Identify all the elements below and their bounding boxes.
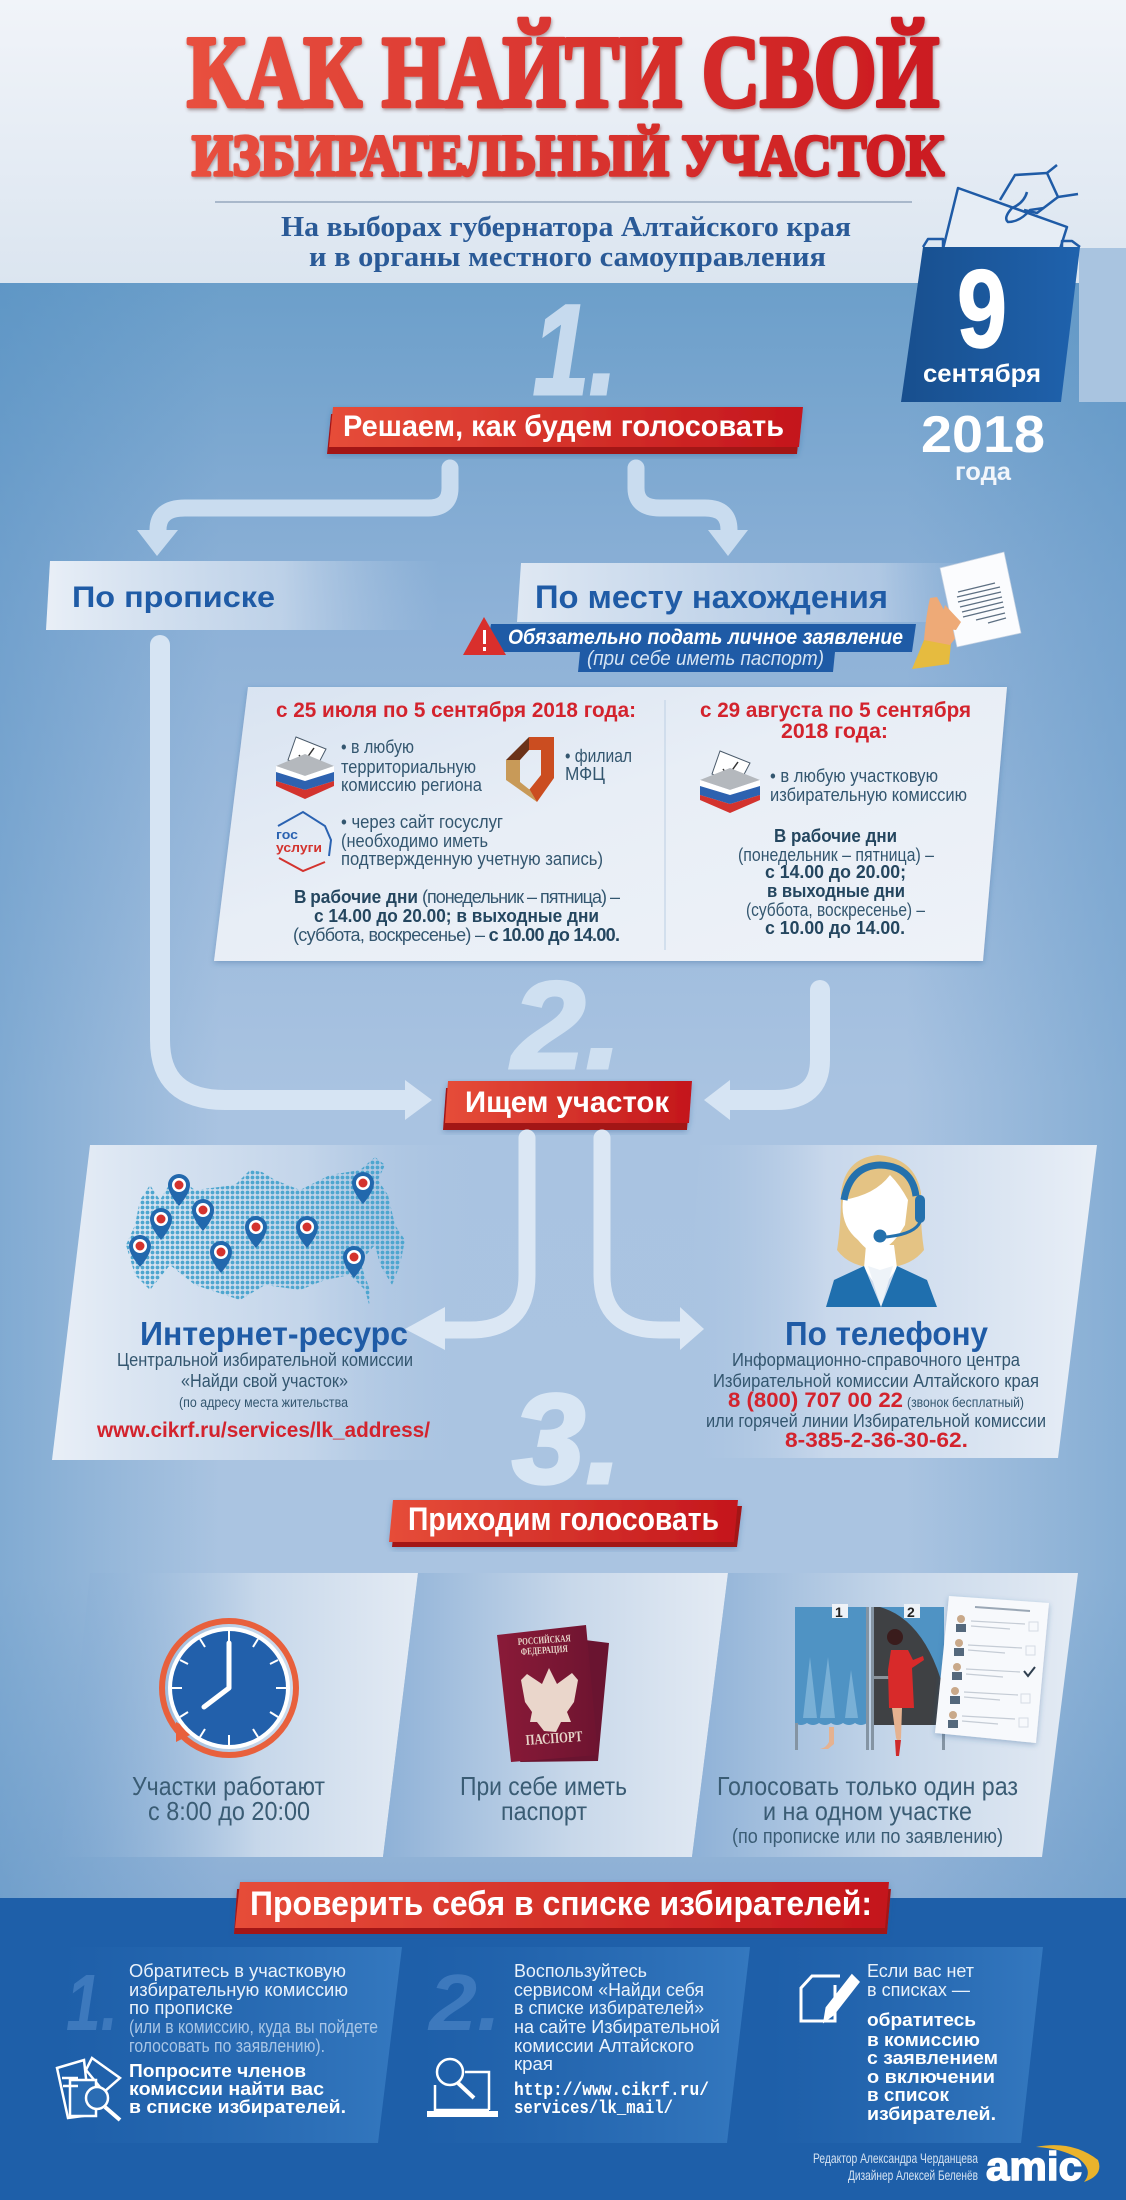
period right: (суббота, воскресенье) – (746, 900, 925, 920)
panel: by phone: (звонок бесплатный) (907, 1395, 1024, 1410)
panel: online service (420, 1947, 750, 2143)
date card (901, 247, 1080, 402)
date card: сентября (923, 360, 1041, 388)
panel: online service: services/lk_mail/ (514, 2099, 673, 2119)
panel: vote once: (по прописке или по заявлению) (732, 1826, 1003, 1848)
panel: hours: с 8:00 до 20:00 (148, 1796, 310, 1826)
icon: operator (826, 1155, 937, 1307)
panel: online service: края (514, 2054, 553, 2074)
arrow: step 2 to phone (602, 1138, 704, 1350)
banner: check yourself (234, 1882, 891, 1934)
icon: note with pencil (801, 1976, 858, 2021)
icon: voting booths: 2 (907, 1604, 915, 1620)
notice: personal application (463, 617, 916, 672)
period left: территориальную (341, 757, 476, 777)
bottom section background (0, 1898, 1126, 2200)
subtitle (281, 211, 851, 273)
panel: passport: паспорт (501, 1796, 587, 1826)
panel: internet resource: www.cikrf.ru/services/lk_address/ (96, 1419, 430, 1442)
panel: internet resource (52, 1145, 480, 1460)
credits (813, 2150, 978, 2183)
icon: ballot box right (700, 751, 760, 813)
panel: by phone: По телефону (785, 1315, 989, 1352)
period left: комиссию региона (341, 775, 483, 795)
banner: check yourself: Проверить себя в списке избирателей: (250, 1885, 872, 1923)
icon: ballot paper (935, 1596, 1049, 1743)
panel: online service: 2. (427, 1958, 501, 2047)
banner: step 2 (443, 1081, 692, 1130)
period left: (необходимо иметь (341, 831, 488, 851)
year: 2018 (921, 406, 1045, 464)
period left: с 25 июля по 5 сентября 2018 года: (276, 699, 636, 722)
panel: registration: По прописке (72, 581, 275, 614)
notice: personal application: Обязательно подать личное заявление (508, 626, 903, 649)
panel: by phone: Информационно-справочного центра (732, 1350, 1021, 1370)
panel: by location: По месту нахождения (535, 579, 888, 615)
icon: passport: ФЕДЕРАЦИЯ (520, 1644, 569, 1658)
period right: • в любую участковую (770, 766, 938, 786)
icon: passport (497, 1625, 609, 1762)
panel: internet resource: (по адресу места жительства (179, 1395, 348, 1410)
panel: vote once: Голосовать только один раз (717, 1771, 1018, 1801)
panel: online service: http://www.cikrf.ru/ (514, 2081, 709, 2101)
credits: Дизайнер Алексей Беленёв (848, 2167, 978, 2183)
icon: hand with document (912, 552, 1021, 669)
arrow: step 2 to internet (405, 1138, 527, 1350)
right side strip (1079, 248, 1126, 402)
title (187, 16, 944, 188)
panel: internet resource: Интернет-ресурс (140, 1315, 408, 1352)
panel: passport (383, 1573, 728, 1857)
panel: not on the list: в список (867, 2085, 950, 2105)
panel: by location (517, 563, 1000, 622)
panel: contact commission: избирательную комиссию (129, 1980, 348, 2000)
period left (276, 699, 636, 945)
panel: online service: сервисом «Найди себя (514, 1980, 704, 2000)
panel: application periods (214, 687, 1007, 961)
panel: by phone: или горячей линии Избирательной комиссии (706, 1411, 1046, 1431)
icon: voting booths (795, 1604, 945, 1756)
period right: избирательную комиссию (770, 785, 967, 805)
panel: by phone: 8-385-2-36-30-62. (785, 1429, 968, 1452)
banner: step 3: Приходим голосовать (408, 1501, 719, 1537)
year: года (955, 458, 1012, 486)
banner: step 1 (327, 407, 803, 454)
panel: not on the list: избирателей. (867, 2104, 996, 2124)
panel: contact commission: комиссии найти вас (129, 2079, 324, 2099)
period left: • филиал (565, 746, 632, 766)
period left: • в любую (341, 737, 414, 757)
period right: в выходные дни (767, 881, 905, 901)
arrow: right branch (636, 468, 748, 556)
panel: contact commission: в списке избирателей. (129, 2097, 346, 2117)
panel: contact commission: Попросите членов (129, 2061, 306, 2081)
icon: gosuslugi logo (276, 812, 331, 871)
panel: not on the list: обратитесь (867, 2010, 976, 2030)
panel: passport: При себе иметь (460, 1771, 627, 1801)
panel: online service: в списке избирателей» (514, 1998, 704, 2018)
step number 3: 3. (512, 1368, 622, 1511)
period right: с 10.00 до 14.00. (765, 918, 905, 938)
panel: contact commission: по прописке (129, 1998, 233, 2018)
notice: personal application: (при себе иметь паспорт) (587, 648, 824, 670)
icon: clock (162, 1621, 296, 1755)
step number 2: 2. (510, 957, 622, 1095)
period right: с 14.00 до 20.00; (765, 862, 906, 882)
period left: МФЦ (565, 764, 605, 784)
panel: internet resource: Центральной избирательной комиссии (117, 1350, 413, 1370)
panel: not on the list (770, 1947, 1043, 2143)
icon: laptop with magnifier (427, 2059, 498, 2117)
subtitle: На выборах губернатора Алтайского края (281, 211, 851, 243)
banner: step 1: Решаем, как будем голосовать (343, 410, 784, 443)
title: ИЗБИРАТЕЛЬНЫЙ УЧАСТОК (192, 123, 944, 188)
banner: step 3 (389, 1500, 742, 1547)
panel: hours (60, 1573, 418, 1857)
step number 1: 1. (533, 279, 617, 422)
panel: registration (46, 561, 440, 630)
panel: not on the list: с заявлением (867, 2048, 998, 2068)
period right (700, 699, 971, 938)
arrow: location to step 2 (704, 990, 820, 1120)
date card: 9 (957, 248, 1007, 371)
header band (0, 0, 1126, 283)
panel: contact commission: Обратитесь в участковую (129, 1961, 346, 1981)
panel: vote once (692, 1573, 1078, 1857)
panel: not on the list: в списках — (867, 1980, 970, 2000)
panel: by phone: Избирательной комиссии Алтайского края (713, 1371, 1039, 1391)
panel: internet resource: «Найди свой участок» (181, 1371, 348, 1391)
icon: gosuslugi logo: гос (276, 827, 298, 842)
subtitle: и в органы местного самоуправления (309, 241, 826, 273)
panel: contact commission (57, 1947, 402, 2143)
icon: voting booths: 1 (835, 1604, 843, 1620)
panel: contact commission: 1. (66, 1958, 118, 2047)
period right: 2018 года: (781, 720, 888, 743)
icon: passport: ПАСПОРТ (525, 1729, 583, 1749)
period right: В рабочие дни (774, 826, 897, 846)
title: КАК НАЙТИ СВОЙ (187, 16, 939, 129)
period left: • через сайт госуслуг (341, 812, 503, 832)
icon: gosuslugi logo: услуги (276, 840, 322, 855)
panel: not on the list: Если вас нет (867, 1961, 974, 1981)
icon: ballot box left (276, 737, 334, 799)
panel: online service: на сайте Избирательной (514, 2017, 720, 2037)
credits: Редактор Александра Черданцева (813, 2150, 978, 2166)
page background (0, 283, 1126, 1900)
period right: (понедельник – пятница) – (738, 845, 934, 865)
period left: подтвержденную учетную запись) (341, 849, 603, 869)
icon: MFC logo (506, 737, 554, 802)
map of Russia with pins (126, 1157, 405, 1308)
logo: amic: amic (986, 2145, 1082, 2189)
panel: by phone: 8 (800) 707 00 22 (728, 1389, 903, 1412)
pins (129, 1172, 374, 1278)
panel: vote once: и на одном участке (763, 1796, 972, 1826)
period left: В рабочие дни (понедельник – пятница) – (294, 887, 620, 907)
banner: step 2: Ищем участок (465, 1086, 670, 1119)
panel: online service: комиссии Алтайского (514, 2036, 694, 2056)
panel: contact commission: голосовать по заявлению). (129, 2036, 325, 2056)
panel: not on the list: о включении (867, 2067, 995, 2087)
period left: (суббота, воскресенье) – с 10.00 до 14.00. (293, 925, 620, 945)
period left: с 14.00 до 20.00; в выходные дни (314, 906, 599, 926)
icon: ballot and hand (923, 165, 1080, 249)
arrow: left branch (137, 468, 450, 556)
icon: passport: РОССИЙСКАЯ (517, 1632, 572, 1648)
eagle emblem (521, 1668, 578, 1732)
arrow: registration to step 2 (160, 645, 432, 1120)
year (921, 406, 1045, 486)
icon: warning (463, 617, 506, 655)
divider under title (215, 201, 912, 203)
panel: not on the list: в комиссию (867, 2030, 980, 2050)
icon: documents with magnifier (57, 2058, 120, 2120)
panel: contact commission: (или в комиссию, куда вы пойдете (129, 2017, 378, 2037)
panel: hours: Участки работают (132, 1771, 325, 1801)
period right: с 29 августа по 5 сентября (700, 699, 971, 722)
panel: online service: Воспользуйтесь (514, 1961, 647, 1981)
panel: by phone (680, 1145, 1097, 1458)
